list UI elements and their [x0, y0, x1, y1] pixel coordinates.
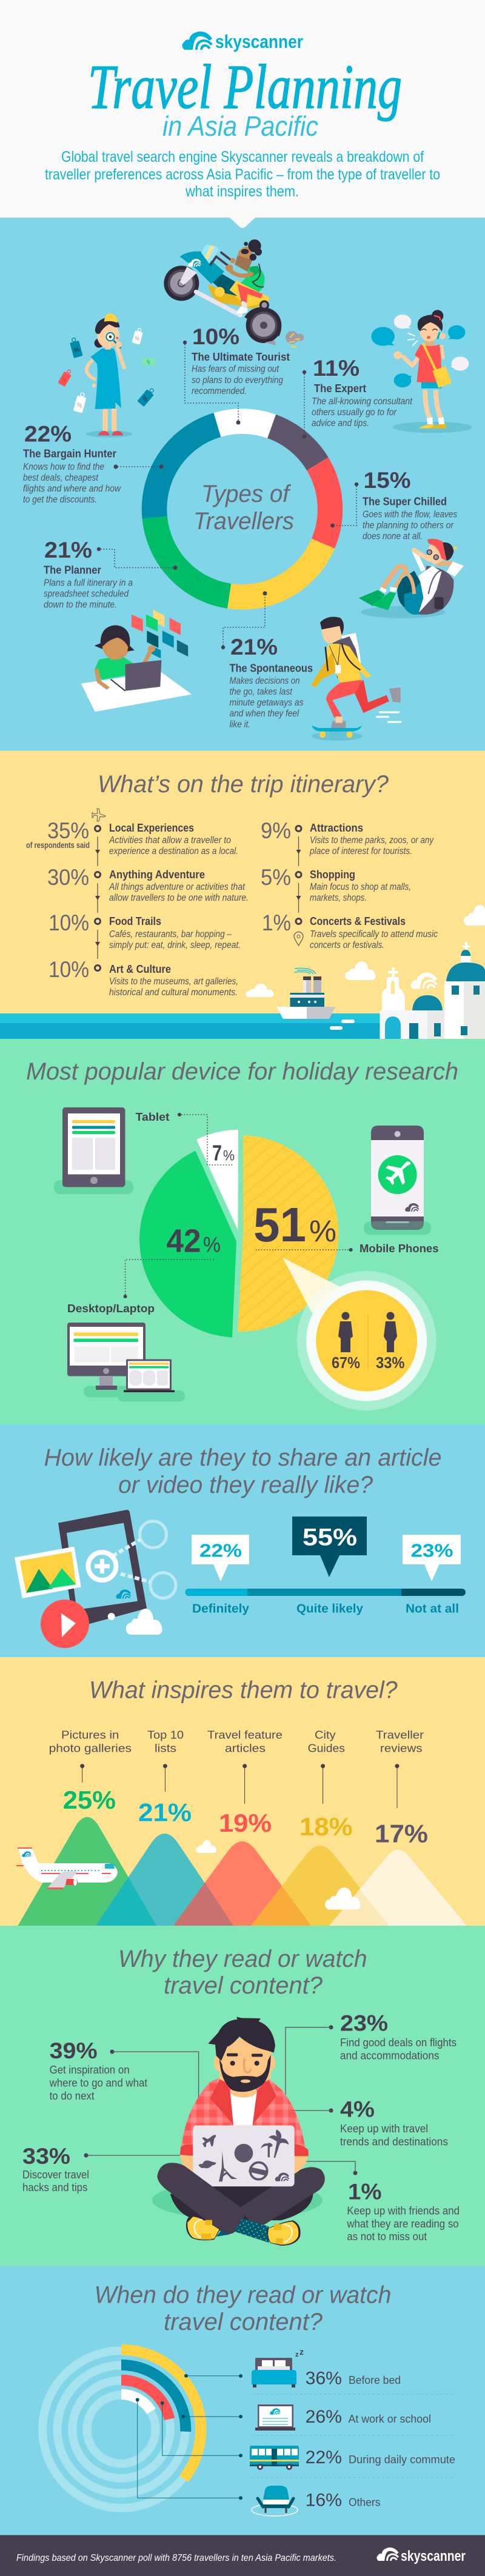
stat: inspiration 39 percent: 39% [50, 2038, 98, 2063]
stat: inspiration 39 percent [49, 2038, 147, 2102]
illustration: ship [276, 968, 336, 1019]
panel: inspiration [0, 1657, 485, 1926]
panel: types of travellers [0, 218, 485, 751]
pie chart [139, 1130, 338, 1337]
donut label: Travellers [193, 508, 294, 535]
stat: bargain hunter: flights and where and how [23, 484, 122, 494]
value: 7 percent: % [223, 1148, 235, 1164]
stat: expert: The all-knowing consultant [312, 396, 413, 407]
stat: inspiration 39 percent: Get inspiration on [50, 2064, 130, 2076]
stat: friends 1 percent [346, 2180, 460, 2243]
stat: spontaneous: like it. [229, 719, 250, 730]
item: concerts and festivals [262, 910, 438, 950]
heading: sharing [44, 1444, 441, 1498]
item: food trails: 10% [48, 910, 89, 935]
illustration: clouds [246, 905, 485, 997]
icon: bed: z [299, 2347, 304, 2357]
row: at work or school: 26% [306, 2407, 342, 2427]
panel: sharing [0, 1424, 485, 1657]
stat: bargain hunter: best deals, cheapest [23, 473, 99, 483]
callout: 55 percent [292, 1517, 367, 1577]
callout: mobile gender split: 67% [332, 1353, 360, 1372]
row: during daily commute [250, 2446, 455, 2470]
stat: planner: Plans a full itinerary in a [44, 578, 133, 588]
stat: trends 4 percent: Keep up with travel [340, 2123, 428, 2135]
stat: deals 23 percent: and accommodations [340, 2050, 439, 2062]
item: concerts and festivals: 1% [262, 910, 291, 935]
heading: sharing: How likely are they to share an article [44, 1444, 441, 1471]
donut chart [155, 421, 330, 597]
stat: expert: The Expert [314, 382, 366, 395]
source note: Findings based on Skyscanner poll with 8756 travellers in ten Asia Pacific markets. [16, 2553, 336, 2563]
callout: 55 percent: 55% [303, 1524, 357, 1550]
stat: spontaneous: minute getaways as [229, 698, 304, 708]
stat: friends 1 percent: as not to miss out [347, 2231, 427, 2243]
intro text [45, 148, 440, 200]
column: city guides: 18% [299, 1812, 353, 1841]
row: before bed [252, 2347, 401, 2388]
stat: bargain hunter [23, 422, 164, 505]
callout: 22 percent: 22% [199, 1540, 242, 1561]
illustration: bargain hunter [58, 313, 156, 438]
illustration: skateboarding traveller [311, 617, 401, 741]
item: shopping: 5% [261, 865, 291, 890]
icon: bed: z [295, 2351, 299, 2358]
item: local experiences: of respondents said [26, 840, 90, 850]
item: attractions: 9% [261, 818, 291, 843]
stat: deals 23 percent: Find good deals on flights [340, 2037, 457, 2049]
callout: 23 percent: 23% [411, 1540, 453, 1561]
item: local experiences: 35% [47, 818, 89, 843]
column: travel feature articles [207, 1729, 283, 1837]
panel: header [0, 0, 485, 218]
chart: mountains [18, 1817, 467, 1926]
stat: bargain hunter: to get the discounts. [23, 495, 97, 505]
stat: super chilled: Goes with the flow, leaves [363, 509, 457, 520]
column: city guides [299, 1729, 353, 1841]
stat: expert: others usually go to for [312, 407, 397, 418]
column: top 10 lists: lists [155, 1742, 176, 1754]
value: 51 percent [253, 1198, 336, 1252]
callout: mobile gender split: 33% [376, 1353, 405, 1372]
column: travel feature articles: articles [225, 1742, 266, 1754]
heading: why [118, 1946, 367, 1999]
item: attractions: Attractions [310, 822, 363, 834]
column: traveller reviews: 17% [375, 1819, 428, 1847]
stat: ultimate tourist: recommended. [192, 386, 247, 396]
item: anything adventure: Anything Adventure [109, 869, 205, 881]
icon: laptop [255, 2404, 295, 2431]
stat: spontaneous: Makes decisions on [229, 676, 299, 686]
donut label: Types of [201, 481, 292, 507]
illustration: santorini buildings [380, 942, 485, 1039]
stat: trends 4 percent: 4% [340, 2097, 375, 2122]
heading: itinerary: What’s on the trip itinerary? [98, 771, 389, 798]
connector lines [84, 2025, 358, 2175]
item: local experiences: Activities that allow a traveller to [109, 835, 231, 846]
item: food trails: Food Trails [109, 915, 161, 927]
value: 51 percent: % [309, 1214, 336, 1248]
stat: deals 23 percent [340, 2011, 457, 2062]
slice: tablet [196, 1130, 238, 1230]
item: shopping: Main focus to shop at malls, [310, 882, 411, 892]
stat: planner: spreadsheet scheduled [44, 589, 129, 599]
panel: device research [0, 1039, 485, 1424]
panel: trip itinerary [0, 750, 485, 1039]
callout: 22 percent [192, 1535, 249, 1581]
heading: why: travel content? [164, 1972, 323, 1999]
stat: super chilled: 15% [364, 468, 411, 493]
item: local experiences: experience a destination as a local. [109, 846, 238, 856]
icon: tablet [54, 1107, 133, 1194]
row: others: Others [349, 2496, 381, 2508]
illustration: expert on phone [371, 310, 472, 433]
item: food trails [48, 910, 241, 959]
heading: inspiration: What inspires them to travel? [89, 1677, 398, 1703]
column: travel feature articles: Travel feature [207, 1729, 283, 1741]
label: tablet: Tablet [136, 1111, 170, 1123]
illustration: super chilled traveller [359, 539, 464, 618]
item: art and culture [48, 957, 238, 998]
stat: hacks 33 percent: 33% [22, 2144, 70, 2169]
stat: friends 1 percent: Keep up with friends and [347, 2204, 460, 2217]
icon: bus [250, 2446, 299, 2470]
icon: desktop and laptop [67, 1323, 185, 1401]
column: top 10 lists [138, 1729, 192, 1827]
column: photo galleries: Pictures in [61, 1729, 119, 1741]
panel: when they read or watch [0, 2266, 485, 2535]
donut label [193, 481, 294, 535]
stat: ultimate tourist: so plans to do everything [192, 375, 283, 385]
item: concerts and festivals: Concerts & Festivals [310, 915, 406, 927]
footer [0, 2535, 485, 2576]
row: at work or school [255, 2404, 431, 2431]
bar labels: Quite likely [296, 1603, 364, 1616]
stat: spontaneous [221, 592, 313, 730]
illustration: bargain hunter: % [134, 335, 141, 342]
item: concerts and festivals: Travels specifically to attend music [310, 929, 438, 939]
column: top 10 lists: 21% [138, 1798, 192, 1827]
heading: when: travel content? [164, 2309, 323, 2335]
illustration: sea [0, 1013, 485, 1039]
illustration: phone sharing media [15, 1510, 176, 1648]
column: top 10 lists: Top 10 [147, 1729, 184, 1741]
column: city guides: Guides [308, 1742, 345, 1754]
label: desktop and laptop: Desktop/Laptop [67, 1303, 155, 1315]
stat: super chilled [330, 468, 457, 542]
illustration: bargain hunter: % [76, 402, 83, 410]
column: traveller reviews: reviews [380, 1742, 422, 1754]
heading: when [95, 2281, 391, 2335]
row: others: 16% [306, 2490, 342, 2510]
stat: ultimate tourist [183, 324, 290, 424]
item: shopping [261, 865, 411, 913]
stat: ultimate tourist: 10% [192, 324, 239, 349]
item: anything adventure: allow travellers to be one with nature. [109, 893, 249, 903]
slice: desktop and laptop [139, 1150, 236, 1337]
item: art and culture: Visits to the museums, art galleries, [109, 976, 238, 987]
stat: expert [302, 356, 413, 439]
row: before bed: 36% [306, 2368, 342, 2388]
illustration: man with laptop [152, 2017, 325, 2246]
column: photo galleries [49, 1729, 132, 1814]
stat: spontaneous: The Spontaneous [229, 662, 313, 674]
stat: spontaneous: the go, takes last [229, 687, 293, 697]
stat: hacks 33 percent: hacks and tips [22, 2181, 87, 2194]
stat: spontaneous: 21% [230, 635, 278, 659]
stat: hacks 33 percent [22, 2144, 89, 2194]
icon: plane outline [92, 809, 105, 821]
illustration: bargain hunter: % [141, 395, 149, 403]
bar labels [192, 1603, 459, 1616]
item: anything adventure: All things adventure or activities that [109, 882, 246, 892]
column: traveller reviews [375, 1729, 428, 1847]
stat: super chilled: does none at all. [363, 531, 423, 542]
stat: planner: The Planner [44, 564, 101, 576]
value: 51 percent: 51 [253, 1198, 306, 1252]
stat: trends 4 percent: trends and destinations [340, 2136, 448, 2148]
value: 42 percent [166, 1223, 221, 1260]
logo: skyscanner white: skyscanner [401, 2548, 466, 2564]
label: desktop and laptop [67, 1260, 215, 1315]
timeline: left column [26, 818, 249, 998]
stat: super chilled: the planning to others or [363, 520, 454, 531]
bar labels: Not at all [406, 1603, 459, 1616]
stat: inspiration 39 percent: to do next [50, 2090, 95, 2102]
logo: skyscanner white [376, 2548, 466, 2564]
icon: bed [252, 2347, 304, 2387]
item: shopping: Shopping [310, 869, 355, 881]
item: anything adventure: 30% [47, 865, 89, 890]
column: photo galleries: 25% [63, 1786, 116, 1814]
label: tablet [136, 1111, 233, 1165]
stat: bargain hunter: 22% [24, 422, 72, 446]
stat: expert: advice and tips. [312, 418, 369, 429]
heading: why: Why they read or watch [118, 1946, 367, 1972]
column: traveller reviews: Traveller [376, 1729, 424, 1741]
column: photo galleries: photo galleries [49, 1742, 132, 1754]
row: during daily commute: 22% [306, 2448, 342, 2468]
logo: skyscanner [182, 31, 303, 52]
stat: planner: 21% [44, 538, 92, 562]
illustration: clouds and plane [16, 1840, 361, 1909]
item: attractions [261, 818, 434, 866]
stat: inspiration 39 percent: where to go and what [49, 2077, 147, 2089]
illustration: bargain hunter: % [145, 358, 152, 365]
item: art and culture: historical and cultural monuments. [109, 987, 238, 998]
item: concerts and festivals: concerts or festivals. [310, 940, 384, 950]
column: travel feature articles: 19% [219, 1809, 272, 1837]
illustration: bargain hunter: % [61, 376, 68, 384]
column: city guides: City [315, 1729, 336, 1741]
stat: planner: down to the minute. [44, 600, 117, 610]
stat: friends 1 percent: 1% [348, 2180, 382, 2204]
title: Travel Planning [88, 52, 402, 122]
icon: armchair [252, 2486, 298, 2516]
stat: planner [44, 538, 177, 610]
figure: man [338, 1312, 353, 1352]
stat: friends 1 percent: what they are reading so [346, 2218, 459, 2230]
stat: bargain hunter: The Bargain Hunter [23, 447, 116, 459]
label: mobile phones: Mobile Phones [360, 1243, 439, 1255]
item: art and culture: Art & Culture [109, 963, 171, 975]
value: 7 percent [212, 1141, 235, 1166]
item: local experiences [26, 818, 238, 866]
stat: ultimate tourist: The Ultimate Tourist [192, 351, 290, 363]
item: art and culture: 10% [48, 957, 89, 982]
stat: expert: 11% [313, 356, 360, 381]
figure: woman [384, 1312, 397, 1352]
icon: phone [364, 1126, 431, 1235]
row: at work or school: At work or school [348, 2413, 431, 2425]
illustration: bargain hunter: % [73, 345, 81, 355]
bar labels: Definitely [192, 1603, 250, 1616]
chart leader lines [136, 2374, 242, 2500]
label: mobile phones [256, 1243, 439, 1255]
value: 42 percent: % [203, 1233, 221, 1257]
intro text: Global travel search engine Skyscanner reveals a breakdown of [61, 148, 424, 165]
stat: spontaneous: and when they feel [229, 709, 299, 719]
item: anything adventure [47, 865, 249, 913]
stat: bargain hunter: Knows how to find the [23, 462, 104, 472]
illustration: motorbike tourist [164, 239, 304, 347]
heading: when: When do they read or watch [95, 2281, 391, 2308]
illustration: planner at laptop [81, 610, 192, 712]
stat: deals 23 percent: 23% [340, 2011, 388, 2036]
stat: hacks 33 percent: Discover travel [22, 2169, 89, 2181]
item: food trails: simply put: eat, drink, sleep, repeat. [109, 940, 241, 950]
row: before bed: Before bed [349, 2374, 401, 2386]
heading: device: Most popular device for holiday research [26, 1058, 458, 1085]
callout: mobile gender split [283, 1257, 436, 1410]
item: local experiences: Local Experiences [109, 822, 194, 834]
row: during daily commute: During daily commute [349, 2454, 455, 2466]
chart: share likelihood bar [186, 1517, 466, 1616]
logo: skyscanner: skyscanner [215, 31, 303, 52]
stat: ultimate tourist: Has fears of missing out [192, 364, 279, 375]
item: attractions: place of interest for tourists. [309, 846, 412, 856]
callout: 23 percent [403, 1535, 461, 1581]
intro text: what inspires them. [185, 183, 299, 200]
panel: why they read or watch [0, 1926, 485, 2266]
stat: super chilled: The Super Chilled [363, 496, 447, 508]
value: 7 percent: 7 [212, 1141, 222, 1166]
slice: mobile phones [238, 1135, 338, 1332]
stat: trends 4 percent [340, 2097, 448, 2148]
row: others [252, 2486, 381, 2516]
item: shopping: markets, shops. [310, 893, 367, 903]
item: attractions: Visits to theme parks, zoos, or any [310, 835, 434, 846]
timeline: right column [261, 818, 438, 950]
radial bar chart [42, 2350, 201, 2508]
value: 42 percent: 42 [166, 1223, 201, 1260]
item: food trails: Cafés, restaurants, bar hopping – [109, 929, 232, 939]
heading: sharing: or video they really like? [118, 1472, 373, 1498]
subtitle: in Asia Pacific [162, 110, 318, 142]
